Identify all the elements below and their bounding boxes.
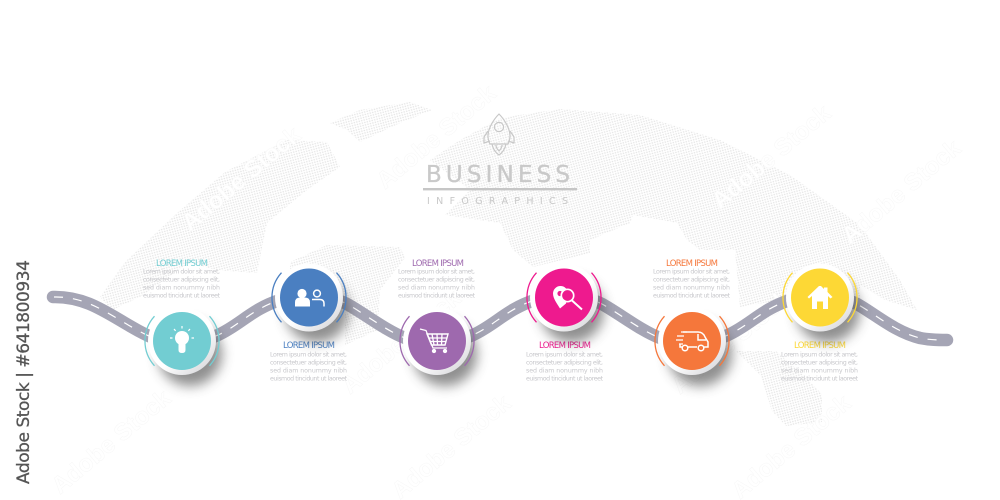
- circle: orange: [655, 307, 732, 386]
- text block: step 4: [526, 341, 604, 382]
- text block: step 3: consectetuer adipiscing elit,: [398, 276, 475, 284]
- circle: yellow: [783, 264, 860, 342]
- text block: step 5: LOREM IPSUM: [666, 259, 718, 269]
- step 2: people: [270, 264, 349, 382]
- stock id side label: Adobe Stock | #641800934: [14, 260, 34, 484]
- circle: blue: [272, 264, 349, 342]
- heading: business: BUSINESS: [426, 162, 570, 188]
- icon: shopping cart: [420, 329, 448, 352]
- text block: step 4: LOREM IPSUM: [539, 341, 591, 351]
- text block: step 4: Lorem ipsum dolor sit amet,: [526, 352, 603, 358]
- text block: step 1: consectetuer adipiscing elit,: [143, 276, 220, 284]
- stock watermarks: Adobe Stock: [837, 134, 967, 250]
- step 6: home: [781, 264, 860, 382]
- text block: step 5: consectetuer adipiscing elit,: [653, 276, 730, 284]
- text block: step 2: [270, 341, 348, 382]
- icon: light bulb: [170, 326, 194, 353]
- stock watermarks: [47, 79, 967, 500]
- icon: map pin and magnifier: [553, 286, 582, 310]
- text block: step 6: LOREM IPSUM: [794, 341, 846, 351]
- text block: step 6: euismod tincidunt ut laoreet: [781, 376, 859, 382]
- step 5: delivery: [653, 259, 732, 386]
- circle: pink: [527, 264, 604, 342]
- icon: delivery truck: [676, 332, 708, 351]
- stock watermarks: Adobe Stock: [372, 79, 502, 195]
- subheading: infographics: INFOGRAPHICS: [427, 196, 568, 207]
- step 1: idea: [143, 259, 222, 386]
- text block: step 2: LOREM IPSUM: [283, 341, 335, 351]
- circle: teal: [145, 307, 222, 386]
- text block: step 2: euismod tincidunt ut laoreet: [270, 376, 348, 382]
- text block: step 1: LOREM IPSUM: [156, 259, 208, 269]
- text block: step 3: sed diam nonummy nibh: [398, 284, 475, 292]
- stock watermarks: Adobe Stock: [177, 121, 307, 237]
- step 3: shopping: [398, 259, 477, 386]
- text block: step 3: [398, 259, 476, 300]
- road: [53, 296, 947, 344]
- text block: step 2: sed diam nonummy nibh: [270, 368, 347, 374]
- text block: step 5: Lorem ipsum dolor sit amet,: [653, 268, 730, 276]
- text block: step 4: sed diam nonummy nibh: [526, 368, 603, 374]
- text block: step 6: Lorem ipsum dolor sit amet,: [781, 352, 858, 358]
- circle: purple: [400, 307, 477, 386]
- text block: step 3: LOREM IPSUM: [412, 259, 464, 269]
- text block: step 1: euismod tincidunt ut laoreet: [143, 292, 221, 300]
- text block: step 1: sed diam nonummy nibh: [143, 284, 220, 292]
- text block: step 6: sed diam nonummy nibh: [781, 368, 858, 374]
- icon: people: [295, 289, 324, 306]
- text block: step 3: Lorem ipsum dolor sit amet,: [398, 268, 475, 276]
- text block: step 5: [653, 259, 731, 300]
- text block: step 2: consectetuer adipiscing elit,: [270, 360, 347, 366]
- text block: step 1: Lorem ipsum dolor sit amet,: [143, 268, 220, 276]
- stock watermarks: Adobe Stock: [337, 284, 467, 400]
- stock watermarks: Adobe Stock: [667, 284, 797, 400]
- text block: step 6: consectetuer adipiscing elit,: [781, 360, 858, 366]
- text block: step 6: [781, 341, 859, 382]
- text block: step 5: euismod tincidunt ut laoreet: [653, 292, 731, 300]
- step 4: location search: [526, 264, 604, 382]
- text block: step 4: consectetuer adipiscing elit,: [526, 360, 603, 366]
- stock watermarks: Adobe Stock: [707, 99, 837, 215]
- text block: step 3: euismod tincidunt ut laoreet: [398, 292, 476, 300]
- title block: [423, 114, 577, 207]
- text block: step 5: sed diam nonummy nibh: [653, 284, 730, 292]
- dotted world map background: [100, 102, 917, 426]
- icon: house: [808, 286, 832, 309]
- text block: step 4: euismod tincidunt ut laoreet: [526, 376, 604, 382]
- stock watermarks: Adobe Stock: [47, 384, 177, 500]
- icon: rocket: [484, 114, 514, 155]
- text block: step 2: Lorem ipsum dolor sit amet,: [270, 352, 347, 358]
- text block: step 1: [143, 259, 221, 300]
- title rule: [423, 188, 577, 190]
